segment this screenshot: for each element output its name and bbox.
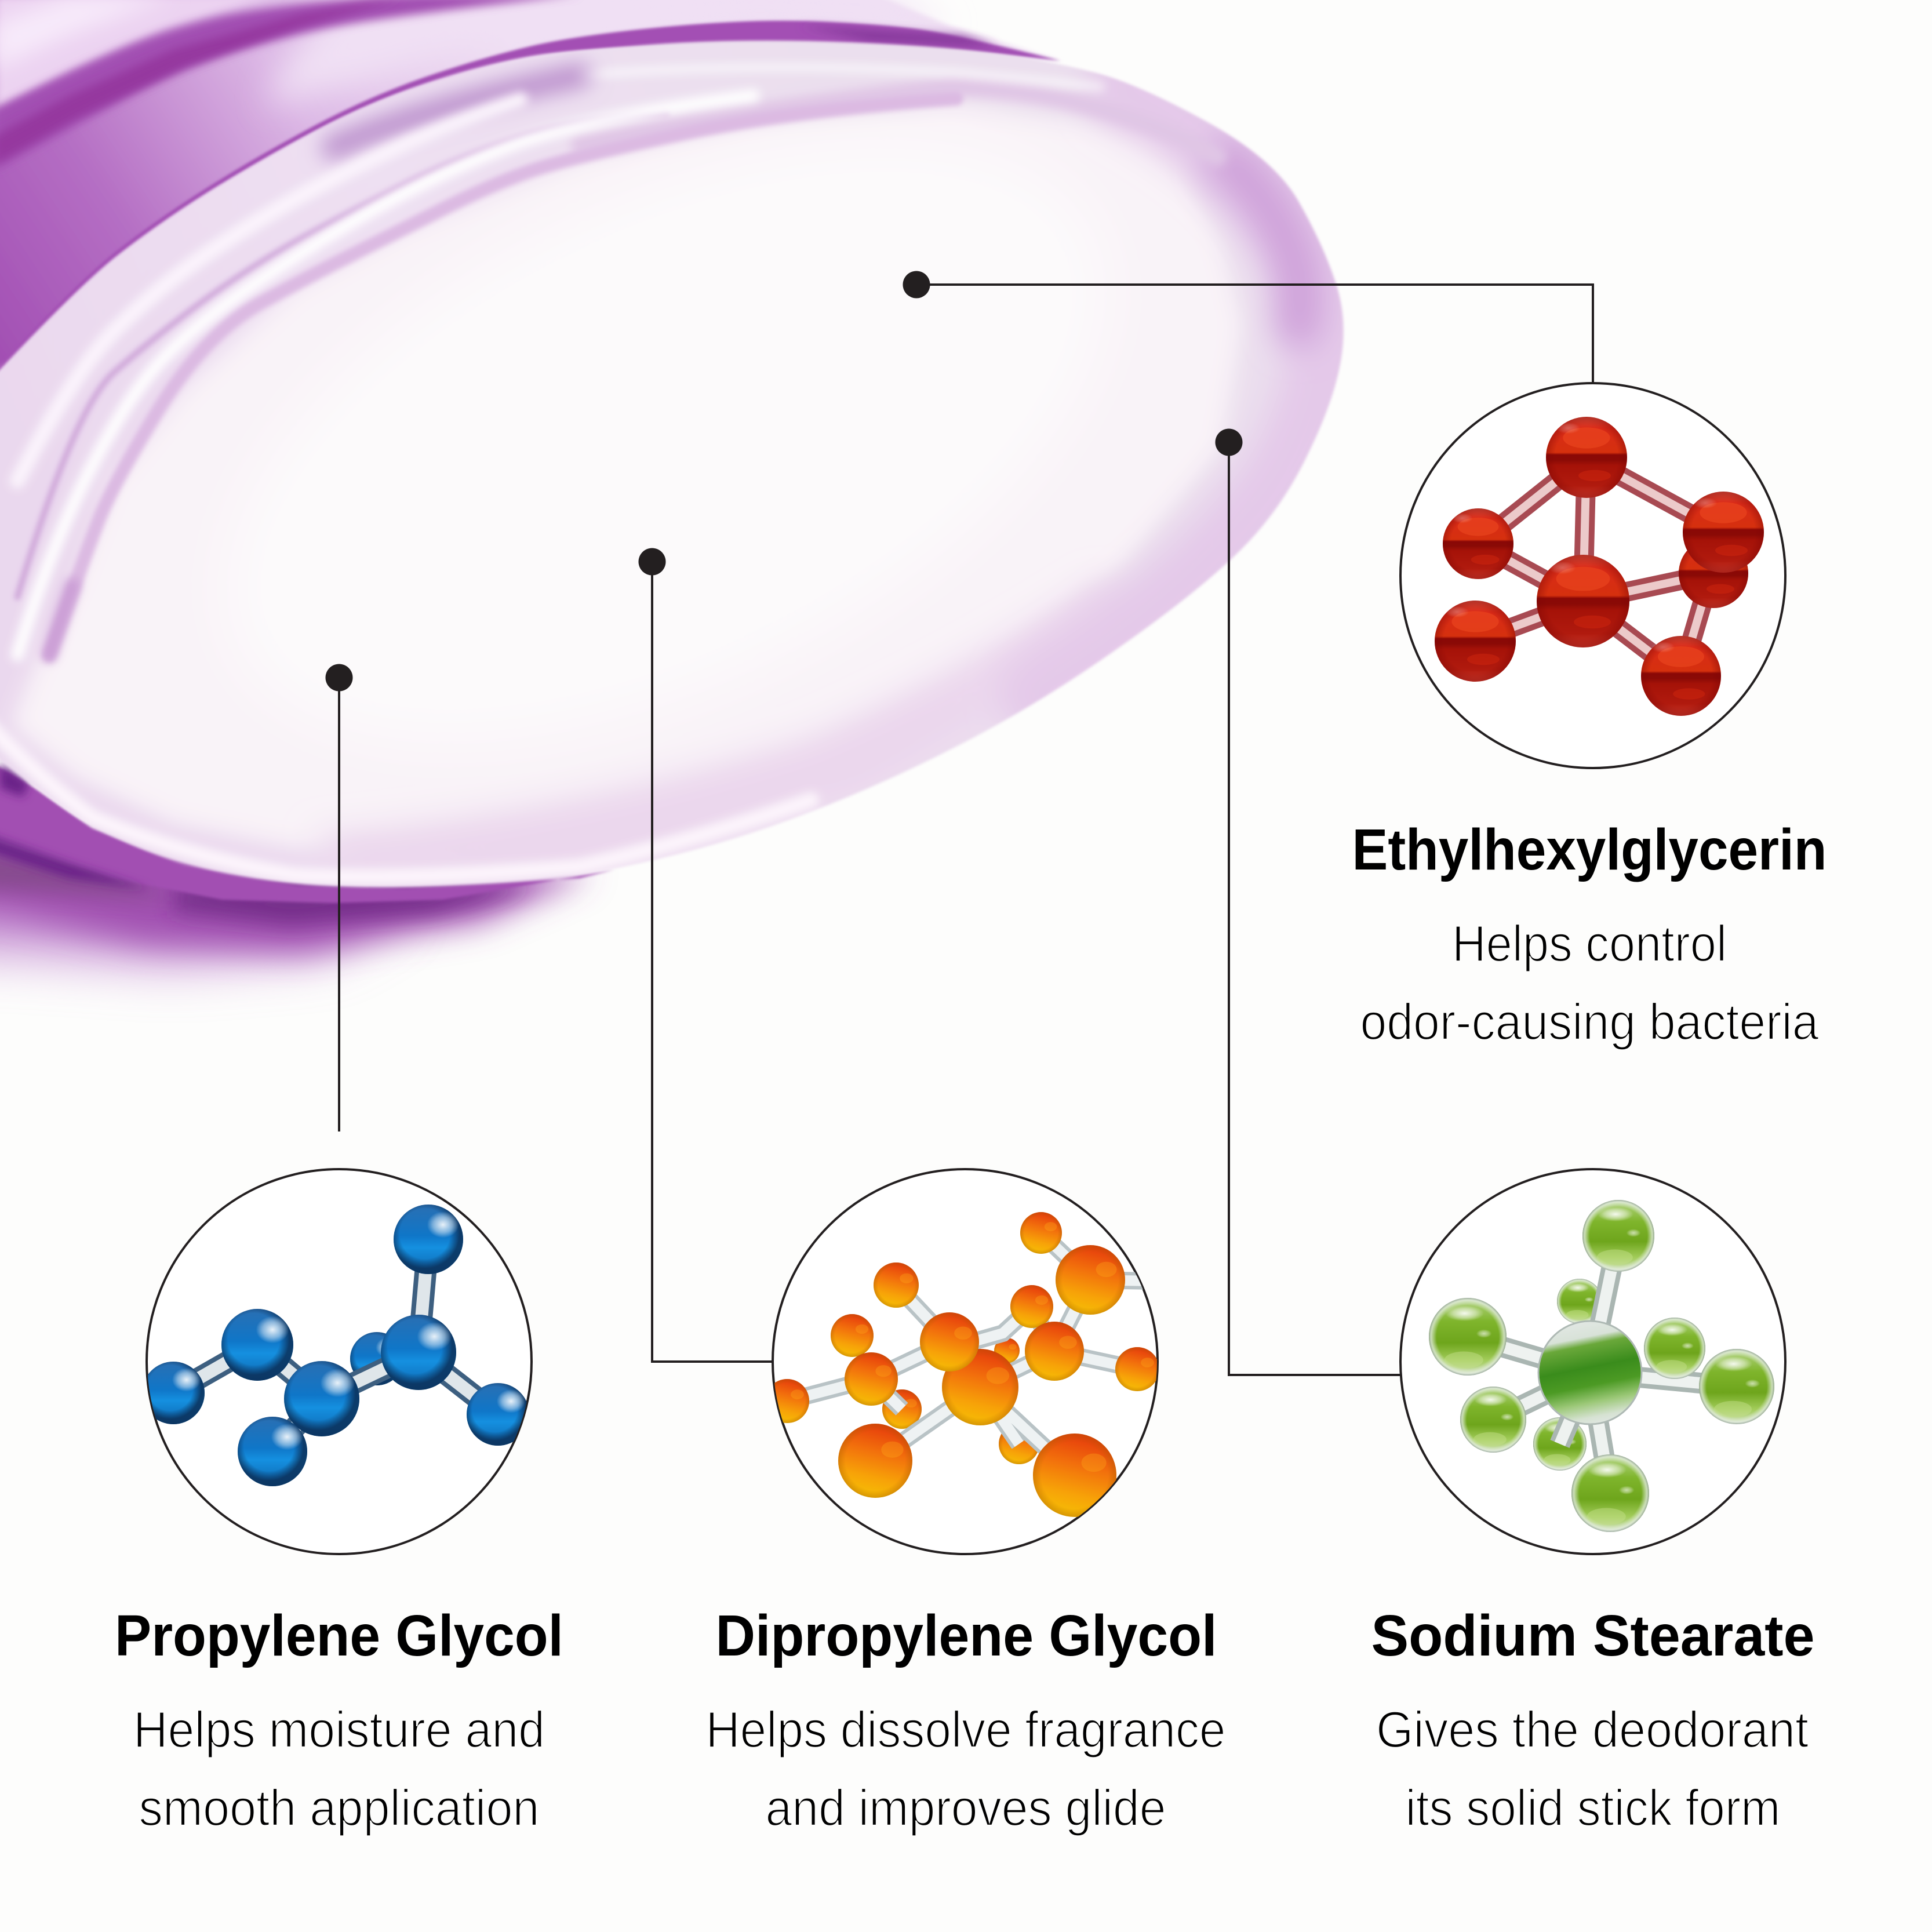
text: Dipropylene Glycol: and improves glide (765, 1779, 1166, 1836)
leader line: Dipropylene Glycol (639, 548, 773, 1362)
text: Sodium Stearate (1371, 1603, 1814, 1836)
rim highlight band (580, 67, 1101, 87)
text: Sodium Stearate: Gives the deodorant (1376, 1701, 1809, 1758)
purple inner rim arc (17, 113, 667, 597)
soft lower tint on the gel (326, 583, 1098, 860)
purple bottom strip of the stick (0, 754, 614, 903)
leader line: Ethylhexylglycerin (903, 271, 1593, 383)
purple inner groove (49, 99, 956, 655)
outer rim white arc (17, 100, 521, 481)
right-hand purple edge of the dome (1043, 87, 1330, 696)
text: Propylene Glycol: Helps moisture and (133, 1701, 545, 1758)
text: Ethylhexylglycerin (1352, 817, 1827, 1050)
dark upper band of the bottle (0, 0, 580, 170)
pale central sheen (133, 13, 1200, 868)
leader line: Propylene Glycol (326, 664, 352, 1131)
text: Sodium Stearate: Sodium Stearate (1371, 1603, 1814, 1668)
dark collar line (0, 21, 1061, 383)
text: Propylene Glycol: Propylene Glycol (115, 1603, 563, 1668)
circle: blue molecule (142, 1169, 532, 1554)
gel dome clipped to its outline (0, 38, 1345, 889)
white inner rim arc (17, 96, 754, 655)
rim base tone (0, 38, 1293, 889)
circle: red molecule (1400, 383, 1785, 768)
lower-left white rim (0, 719, 812, 877)
dark accent at stick bottom left (0, 762, 151, 890)
upper bottle body (0, 0, 1061, 371)
outer purple smudge on the rim (333, 75, 580, 148)
top rim pink arc (580, 87, 1217, 157)
circle: green molecule (1400, 1169, 1785, 1554)
text: Propylene Glycol (115, 1603, 563, 1836)
photo: deodorant stick gel dome (0, 0, 1391, 962)
cast shadow under the stick (0, 835, 591, 962)
text: Ethylhexylglycerin: Helps control (1452, 915, 1727, 972)
inner gel surface (12, 105, 1242, 852)
text: Ethylhexylglycerin: odor-causing bacteria (1360, 993, 1819, 1050)
leader line: Sodium Stearate (1215, 429, 1400, 1375)
text: Dipropylene Glycol: Dipropylene Glycol (715, 1603, 1217, 1668)
text: Dipropylene Glycol (706, 1603, 1225, 1836)
light panel beyond the upper band (267, 0, 951, 104)
circle: orange molecule (765, 1169, 1159, 1554)
text: Ethylhexylglycerin: Ethylhexylglycerin (1352, 817, 1827, 882)
text: Sodium Stearate: its solid stick form (1405, 1779, 1781, 1836)
text: Dipropylene Glycol: Helps dissolve fragrance (706, 1701, 1225, 1758)
top left light corner (0, 0, 277, 111)
small purple lens strip (49, 585, 72, 655)
text: Propylene Glycol: smooth application (139, 1779, 539, 1836)
